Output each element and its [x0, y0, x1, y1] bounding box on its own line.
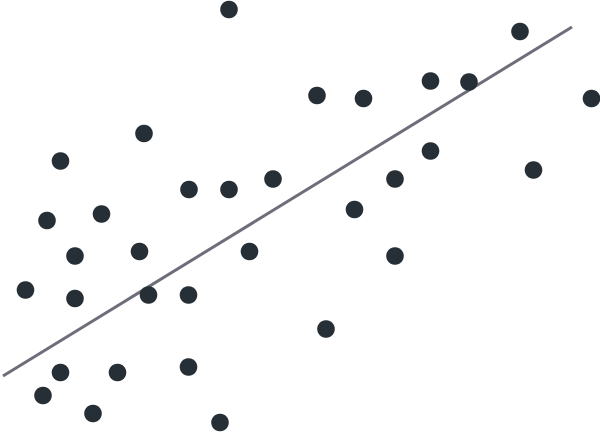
trend line [3, 27, 572, 376]
